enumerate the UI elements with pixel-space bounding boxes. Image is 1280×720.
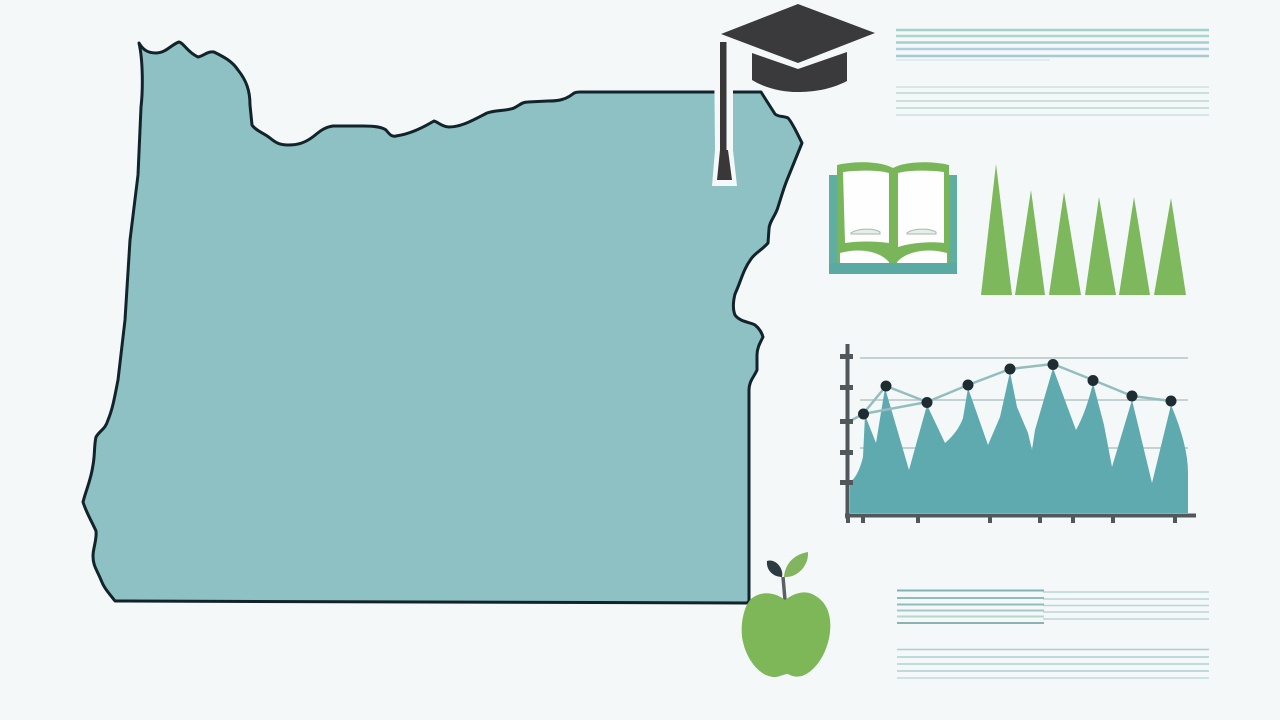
text placeholder lines: top block 1: [896, 30, 1209, 60]
book green frame: [837, 162, 949, 263]
map of Oregon: [83, 42, 802, 603]
cap base: [752, 52, 847, 92]
book bottom band: [829, 263, 957, 274]
chart: green triangles: [981, 164, 1186, 295]
cap tassel: [717, 150, 732, 180]
apple stem: [783, 577, 785, 600]
icon: apple: [742, 552, 830, 677]
cap board: [721, 4, 875, 63]
left page: [843, 171, 889, 243]
triangle 5: [1119, 197, 1150, 295]
right bookmark: [907, 229, 936, 234]
triangle 1: [981, 164, 1012, 295]
chart line series: [852, 364, 1171, 420]
icon: open book: [829, 162, 957, 274]
triangle 2: [1015, 190, 1045, 295]
right page: [898, 171, 944, 247]
cap cord: [720, 42, 726, 152]
book cover: [829, 175, 957, 274]
chart axes: [840, 344, 1196, 523]
left bookmark: [851, 229, 880, 234]
chart: area and line chart: [840, 344, 1196, 523]
cap tassel halo: [712, 42, 737, 186]
chart grid lines: [860, 358, 1188, 448]
left lower page: [840, 250, 889, 263]
apple body: [742, 592, 830, 677]
chart data points: [858, 359, 1176, 420]
icon: graduation cap: [712, 4, 875, 186]
right lower page: [897, 250, 947, 263]
apple dark leaf: [767, 560, 782, 577]
triangle 4: [1085, 197, 1116, 295]
text placeholder lines: top block 2: [896, 87, 1209, 115]
chart area series: [850, 368, 1188, 513]
triangle 6: [1154, 198, 1186, 295]
apple green leaf: [784, 552, 808, 577]
triangle 3: [1049, 192, 1081, 295]
text placeholder lines: bottom block 2: [897, 650, 1209, 678]
text placeholder lines: bottom block 1: [897, 590, 1209, 623]
